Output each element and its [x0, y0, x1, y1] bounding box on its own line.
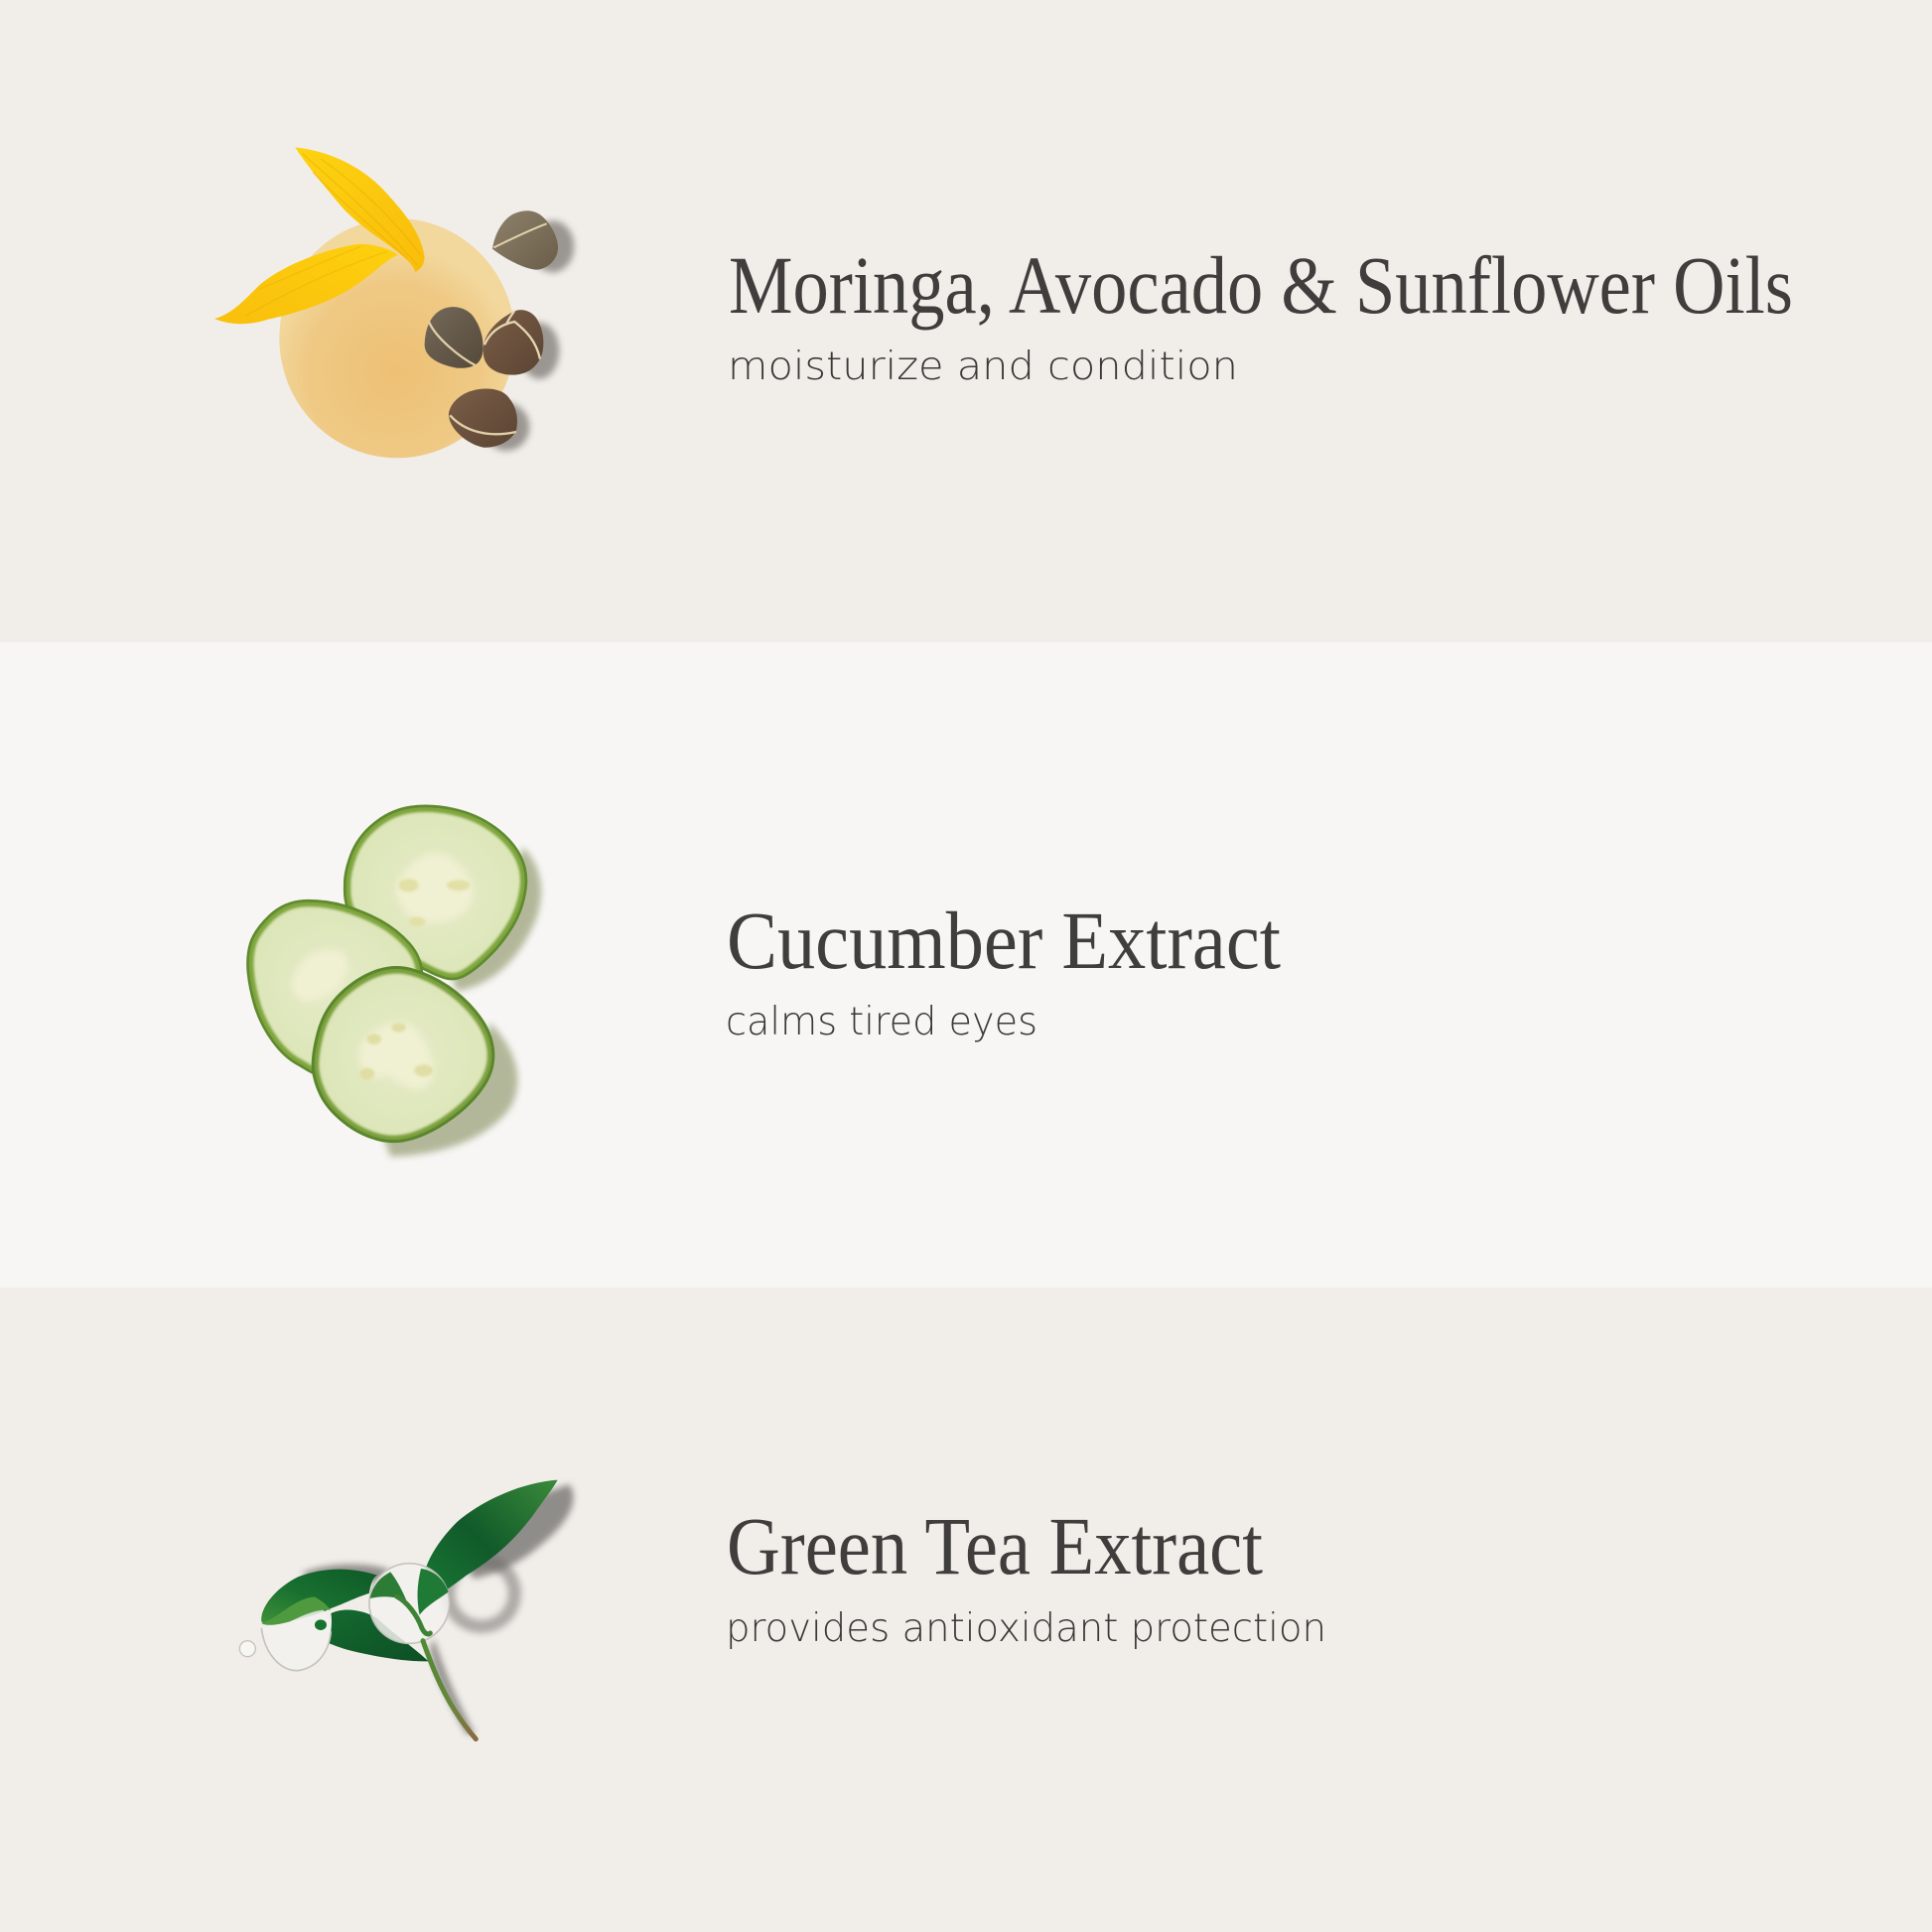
heading: moringa: Moringa, Avocado & Sunflower Oils	[729, 239, 1793, 331]
slice: bottom	[312, 966, 494, 1144]
heading: green tea: Green Tea Extract	[727, 1500, 1263, 1591]
image: oil swatch with sunflower petals and moringa seeds	[214, 147, 574, 458]
subtext: moringa: moisturize and condition	[728, 345, 1238, 389]
panel: cucumber extract	[0, 642, 1932, 1288]
leaf: lower	[329, 1609, 429, 1661]
subtext: cucumber: calms tired eyes	[726, 1000, 1037, 1044]
slice: middle	[241, 894, 427, 1079]
moringa seed: top right	[492, 210, 558, 270]
slice shadows	[384, 847, 541, 1157]
panel: moringa, avocado and sunflower oils	[0, 0, 1932, 642]
seed shadows	[483, 220, 574, 451]
sprig shadows	[301, 1484, 574, 1734]
droplet shadow ring	[449, 1561, 514, 1626]
panel: green tea extract	[0, 1288, 1932, 1932]
moringa seed: centre	[425, 307, 483, 368]
sunflower petal: lower	[214, 244, 398, 324]
image: green tea sprig with droplets	[239, 1480, 574, 1739]
subtext: green tea: provides antioxidant protection	[726, 1606, 1326, 1651]
stem	[397, 1596, 476, 1739]
image: three cucumber slices	[241, 797, 541, 1157]
moringa seed: right	[483, 310, 543, 375]
heading: cucumber: Cucumber Extract	[727, 895, 1281, 986]
leaf: left	[261, 1570, 377, 1624]
oil swatch	[279, 218, 515, 458]
droplet: small	[239, 1641, 255, 1657]
leaf: top right	[418, 1480, 558, 1613]
moringa seed: bottom	[449, 389, 517, 448]
droplet: large centre	[369, 1564, 450, 1643]
droplet: left	[261, 1596, 331, 1671]
sunflower petal: upper	[295, 147, 425, 272]
slice: top	[344, 804, 528, 981]
